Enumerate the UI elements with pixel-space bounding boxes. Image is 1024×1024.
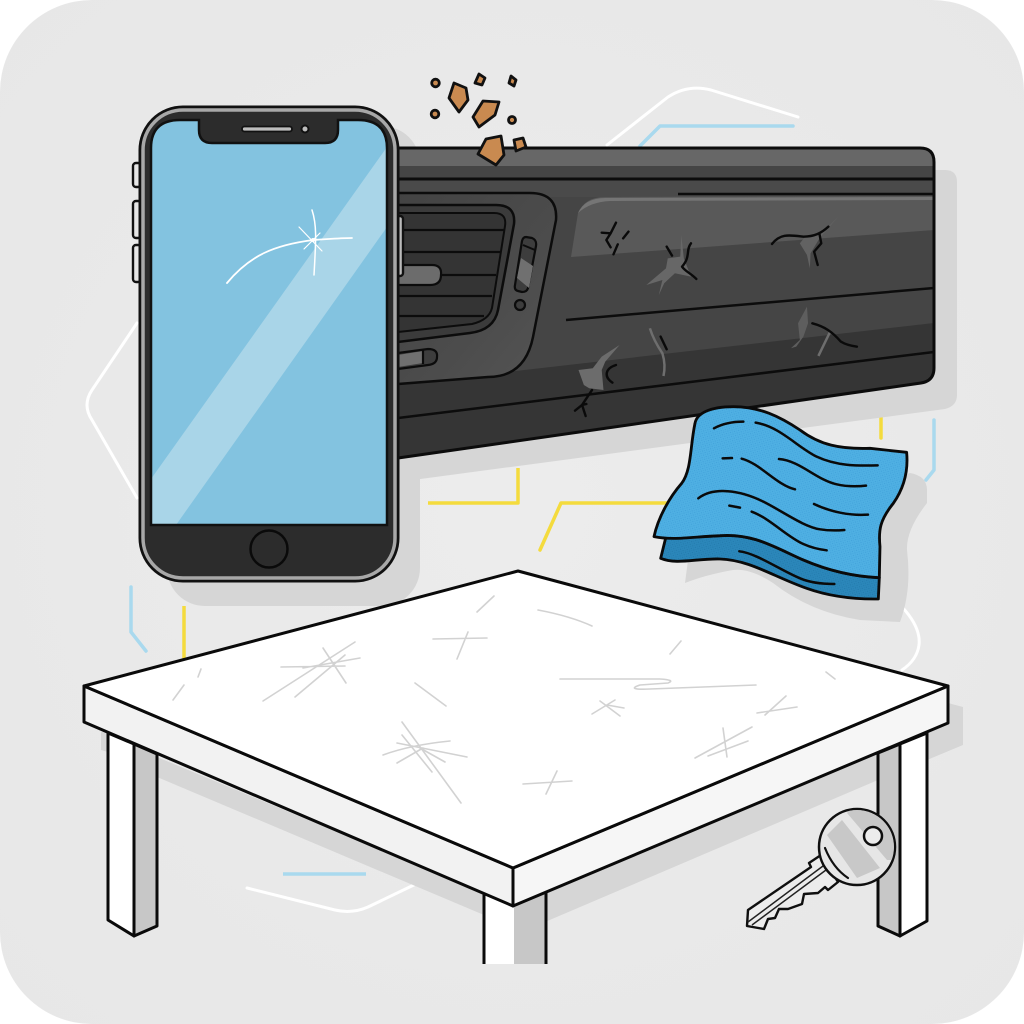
table xyxy=(84,571,948,964)
debris particles xyxy=(431,74,526,165)
front leg xyxy=(484,893,546,964)
drop shadows xyxy=(101,126,963,922)
decorative circuit lines xyxy=(87,88,934,911)
key blade xyxy=(747,855,838,929)
table left edge xyxy=(84,686,513,906)
side buttons xyxy=(133,163,403,282)
dashboard panel xyxy=(398,148,934,470)
camera xyxy=(302,126,308,132)
screen xyxy=(151,120,387,525)
vent grille xyxy=(398,213,505,332)
screen crack xyxy=(227,210,352,283)
screen glare xyxy=(151,147,387,525)
vent louvers xyxy=(398,230,504,316)
vent frame xyxy=(398,205,514,342)
phone body xyxy=(140,107,398,581)
cloth lower layer xyxy=(661,535,879,599)
lower slider xyxy=(398,349,437,369)
left leg xyxy=(108,733,157,936)
dashboard outline xyxy=(398,148,934,458)
key xyxy=(747,800,900,929)
vent switch xyxy=(515,237,536,310)
right leg xyxy=(878,733,927,936)
vent tab xyxy=(398,265,441,285)
table top surface xyxy=(84,571,948,868)
cloth fold lines xyxy=(698,422,878,584)
surface scratches xyxy=(173,596,835,803)
speaker xyxy=(242,126,292,132)
top highlight band xyxy=(398,148,934,166)
phone xyxy=(133,107,403,581)
key hole xyxy=(864,827,882,845)
table right edge xyxy=(513,686,948,906)
glossy panel highlight xyxy=(571,196,934,257)
upper strip xyxy=(398,179,934,197)
key head xyxy=(819,809,895,885)
lower trim lines xyxy=(398,179,934,418)
blue cloth xyxy=(654,407,907,599)
lower dark band xyxy=(400,323,932,456)
cloth top layer xyxy=(654,407,907,578)
home button xyxy=(250,530,288,568)
vent surround xyxy=(398,193,556,384)
dashboard scratches and cracks xyxy=(575,217,857,416)
